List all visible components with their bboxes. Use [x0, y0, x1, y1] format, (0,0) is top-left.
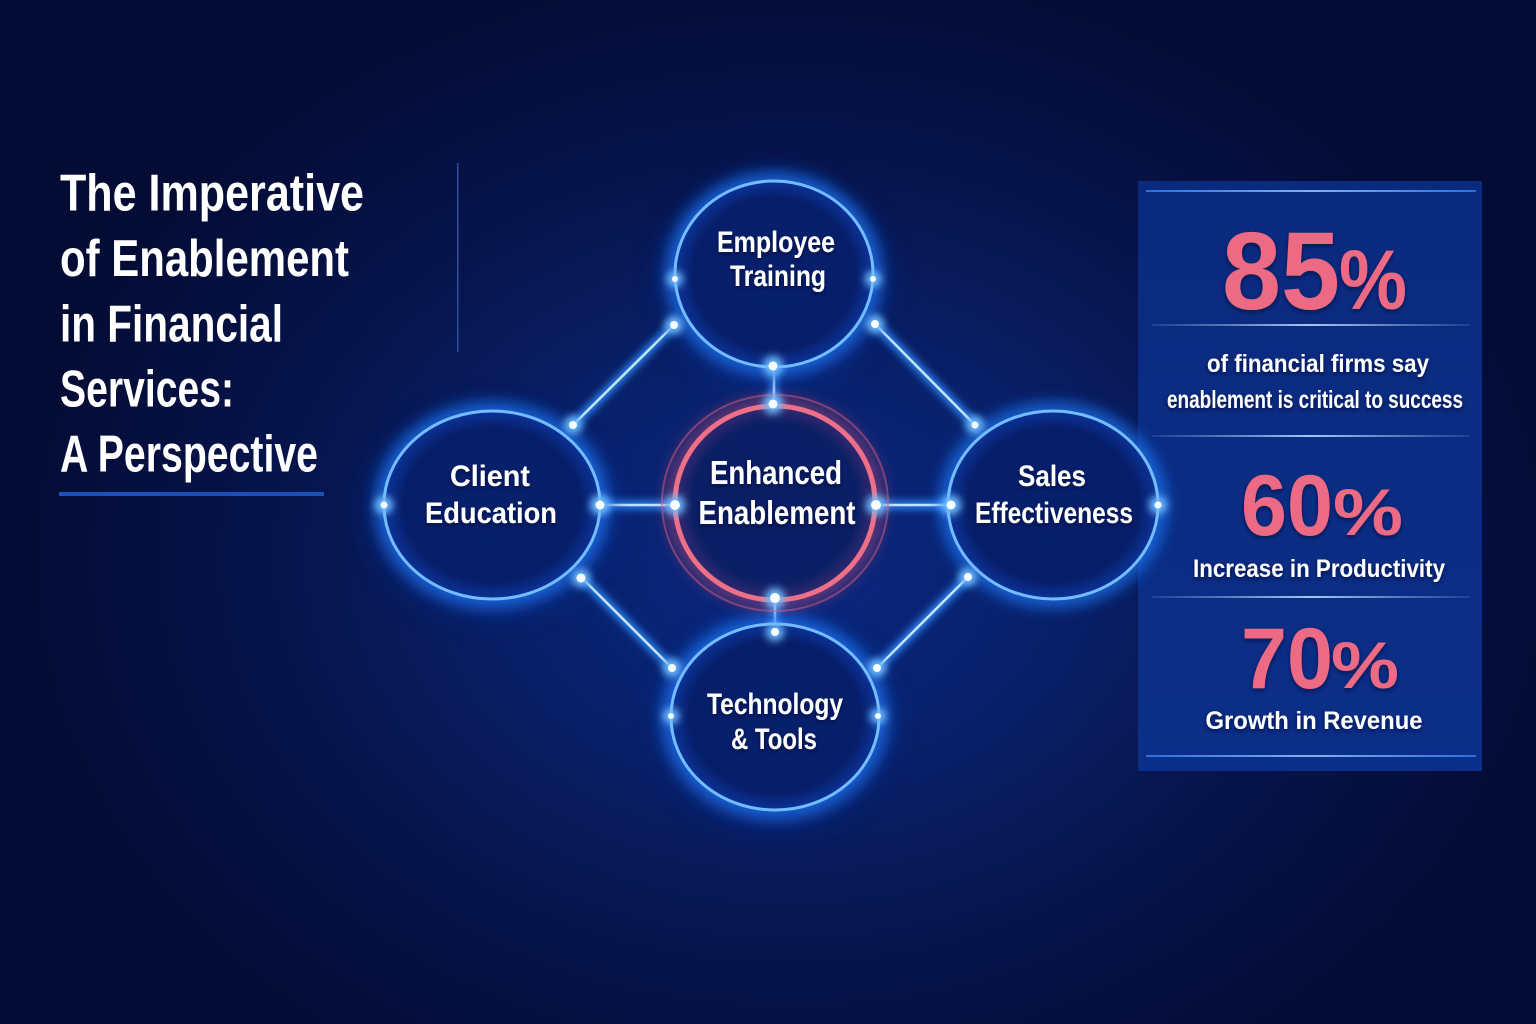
node: Technology and Tools [659, 620, 891, 828]
node: Enhanced Enablement: Enhanced [710, 454, 842, 491]
node: Client Education [370, 408, 610, 616]
node: Sales Effectiveness [948, 411, 1158, 599]
node: Sales Effectiveness: Sales [1018, 460, 1086, 493]
title [60, 164, 364, 484]
stat text: 70%: Growth in Revenue [1206, 707, 1423, 735]
node: Client Education: Education [425, 497, 557, 530]
connectors [573, 324, 975, 668]
stat: 60% [1241, 458, 1403, 554]
node: Employee Training: Employee [717, 226, 835, 259]
vertical divider [457, 163, 458, 352]
stat: 85%: 85 [1222, 210, 1340, 333]
node: Employee Training: Training [730, 260, 826, 293]
stat text: 60%: Increase in Productivity [1193, 555, 1445, 583]
title underline [59, 492, 324, 496]
node: Technology and Tools: & Tools [731, 723, 817, 756]
stat: 85% [1222, 210, 1407, 333]
node: Enhanced Enablement: Enablement [698, 494, 856, 531]
connection nodes [375, 271, 1167, 724]
stat: 85%: % [1339, 233, 1407, 327]
stat: 60%: % [1333, 475, 1403, 549]
stat text: 85%: of financial firms say [1207, 350, 1429, 378]
stat: 70% [1241, 611, 1399, 707]
node: Sales Effectiveness: Effectiveness [975, 497, 1133, 530]
node: Technology and Tools: Technology [707, 688, 843, 721]
stat text: 85% [1167, 350, 1463, 414]
stat: 60%: 60 [1241, 458, 1333, 554]
title: A Perspective [60, 426, 318, 484]
title: Services: [60, 360, 234, 418]
title: of Enablement [60, 230, 349, 288]
panel: statistics [1138, 181, 1482, 771]
node: Client Education: Client [450, 460, 530, 493]
title: The Imperative [60, 164, 364, 222]
node: Employee Training [662, 176, 886, 384]
stat: 70%: % [1331, 628, 1399, 702]
stat: 70%: 70 [1241, 611, 1333, 707]
node: Enhanced Enablement [662, 395, 888, 611]
title: in Financial [60, 296, 283, 354]
